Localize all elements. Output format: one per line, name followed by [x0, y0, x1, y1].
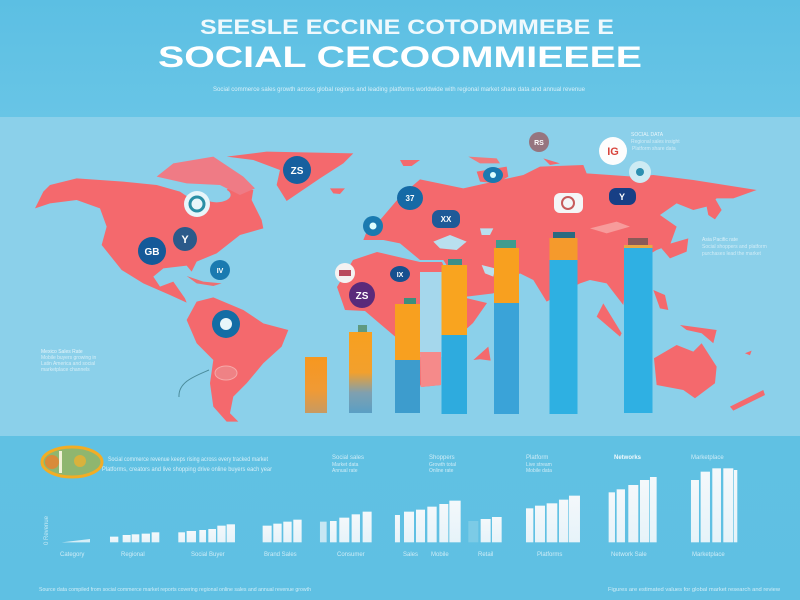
panel: world map: [35, 152, 765, 422]
icon: gold coin badge: [42, 447, 102, 477]
callout: south america note: [41, 349, 97, 373]
footnote right: Figures are estimated values for global market research and review: [608, 587, 780, 593]
column headings: Social sales: [332, 455, 364, 461]
bar 3: [395, 304, 420, 413]
icon: nordic badge: [483, 167, 503, 183]
column headings: Shoppers: [429, 455, 455, 461]
bar 2: [349, 332, 372, 413]
icon: europe badge: [397, 186, 423, 210]
icon: brazil badge: [212, 310, 240, 338]
map: pale wash behind bars: [420, 272, 442, 357]
title: overline: SEESLE ECCINE COTODMMEBE E: [200, 16, 614, 39]
column headings: Online rate: [429, 468, 454, 474]
map: north america: [35, 152, 353, 422]
footnote left: Source data compiled from social commerce market reports covering regional online sales and annual revenue growth: [39, 587, 311, 593]
column headings: Annual rate: [332, 468, 358, 474]
icon: usa left badge: GB: [144, 247, 160, 258]
icon: greenland badge: [283, 156, 311, 184]
icon: arctic badge top: [529, 132, 549, 152]
icon: usa right badge: Y: [181, 234, 189, 246]
bar 5: [494, 248, 519, 414]
icon: usa right badge: [173, 227, 197, 251]
category labels: Marketplace: [692, 552, 725, 558]
column headings: Mobile data: [526, 468, 552, 474]
callout: asia top note: [631, 132, 680, 152]
summary text: Platforms, creators and live shopping drive online buyers each year: [102, 467, 272, 473]
map icons: [138, 132, 651, 380]
icon: arctic teal badge: [629, 161, 651, 183]
callout: japan note: Asia Pacific rate: [702, 237, 738, 243]
icon: arctic badge top: RS: [534, 140, 544, 147]
callout: japan note: [702, 237, 767, 257]
panel: bottom statistics: [0, 436, 800, 600]
icon: central africa badge: [349, 282, 375, 308]
callout: japan note: purchases lead the market: [702, 251, 762, 257]
icon: uk badge: [363, 216, 383, 236]
category labels: Brand Sales: [264, 552, 297, 558]
summary text: [102, 457, 272, 473]
column headings: Market data: [332, 462, 359, 468]
icon: white red badge: [599, 137, 627, 165]
bar chart: main growth bars: [305, 232, 652, 414]
column headings: [332, 455, 724, 474]
icon: siberia badge: Y: [619, 192, 625, 202]
callout: south america note: Mobile buyers growing in: [41, 355, 97, 361]
column headings: Networks: [614, 455, 642, 461]
map: southeast asia islands: [597, 303, 622, 337]
category labels: Consumer: [337, 552, 365, 558]
category labels: Regional: [121, 552, 145, 558]
icon: europe badge: 37: [406, 194, 415, 203]
icon: square camera: [554, 193, 583, 213]
subtitle: Social commerce sales growth across global regions and leading platforms worldwide with regional market share data and annual revenue: [213, 86, 585, 93]
panel: header: [0, 0, 800, 117]
category labels: Platforms: [537, 552, 562, 558]
icon: central africa badge: ZS: [356, 291, 369, 302]
column headings: Growth total: [429, 462, 456, 468]
summary text: Social commerce revenue keeps rising across every tracked market: [108, 457, 268, 463]
map: lakes and inland seas: [433, 222, 630, 277]
icon: siberia badge: [609, 188, 636, 205]
icon: white red badge: IG: [607, 146, 619, 158]
bar 6: [550, 238, 578, 414]
icon: chile badge: [215, 366, 237, 380]
map: eurasia: [363, 157, 765, 411]
category labels: Category: [60, 552, 84, 558]
bar 4: [442, 265, 467, 414]
map: australia: [654, 343, 717, 398]
callout: south america note: marketplace channels: [41, 367, 90, 373]
map: south america: [187, 297, 288, 422]
category labels: [60, 552, 725, 558]
callout: asia top note: Platform share data: [632, 146, 676, 152]
category labels: Mobile: [431, 552, 449, 558]
category labels: Sales: [403, 552, 418, 558]
title: main heading: SOCIAL CECOOMMIEEEE: [158, 41, 642, 74]
bar top markers: [358, 232, 648, 332]
icon: atlantic badge: IV: [217, 268, 224, 275]
column headings: Live stream: [526, 462, 552, 468]
icon: north africa badge: IX: [397, 272, 404, 279]
callout: asia top note: Regional sales insight: [631, 139, 680, 145]
bar 7: [624, 245, 652, 413]
icon: mideast badge: [432, 210, 460, 228]
icon: canada swirl: [184, 191, 210, 217]
icon: usa left badge: [138, 237, 166, 265]
category labels: Network Sale: [611, 552, 647, 558]
map: africa and arabia: [337, 252, 487, 387]
bar 1: [305, 357, 327, 413]
icon: greenland badge: ZS: [291, 166, 304, 177]
column headings: Platform: [526, 455, 548, 461]
callout: south america note: Latin America and social: [41, 361, 95, 367]
icon: mideast badge: XX: [441, 215, 452, 224]
category labels: Social Buyer: [191, 552, 225, 558]
chile pointer: [179, 370, 209, 397]
callout: south america note: Mexico Sales Rate: [41, 349, 83, 355]
icon: west africa badge: [335, 263, 355, 283]
bar chart: small white bars right: [404, 468, 737, 542]
axis label: 0 Revenue: [44, 515, 50, 545]
icon: north africa badge: [390, 266, 410, 282]
icon: atlantic badge: [210, 260, 230, 280]
category labels: Retail: [478, 552, 493, 558]
column headings: Marketplace: [691, 455, 724, 461]
bar chart: small white bars left: [62, 512, 400, 542]
callout: japan note: Social shoppers and platform: [702, 244, 767, 250]
callout: asia top note: SOCIAL DATA: [631, 132, 664, 138]
